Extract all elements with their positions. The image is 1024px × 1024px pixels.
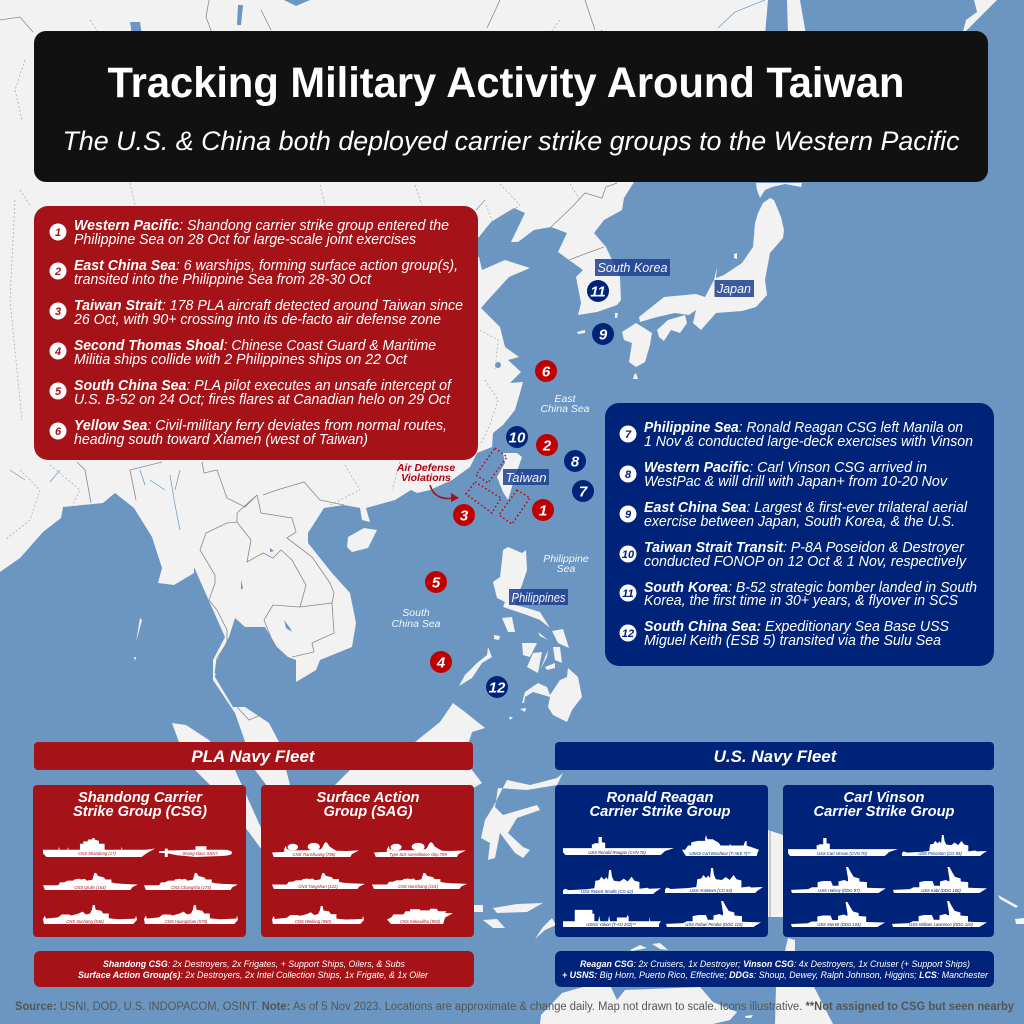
item 7: 1 Nov & conducted large-deck exercises with Vinson	[644, 434, 973, 450]
ship: CNS Huangshan: CNS Huangshan (570)	[165, 919, 208, 924]
panel: China activity list	[34, 206, 478, 460]
item 12: Miguel Keith (ESB 5) transited via the Sulu Sea	[644, 633, 941, 649]
item 9: 9	[625, 509, 632, 521]
panel: Shandong CSG: Shandong Carrier	[78, 789, 203, 806]
panel: Ronald Reagan CSG: Ronald Reagan	[606, 789, 714, 806]
source note: Source: USNI, DOD, U.S. INDOPACOM, OSINT. Note: As of 5 Nov 2023. Locations are approximate & change daily. Map not drawn to scale. Icons illustrative. **Not assigned to CSG but seen nearby	[15, 1001, 1015, 1013]
item 7: 7	[625, 429, 632, 441]
map markers: China: 5	[432, 574, 441, 592]
ship: CNS Tangshan	[272, 873, 365, 889]
ship: CNS Kekexilihu	[387, 909, 453, 924]
map: lakes	[130, 0, 501, 632]
ship: CNS Qiulin: CNS Qiulin (164)	[74, 885, 106, 890]
panel: Shandong CSG: Strike Group (CSG)	[73, 803, 207, 820]
item 7	[620, 420, 973, 450]
panel: Shandong CSG	[33, 785, 246, 937]
ship: USS Robert Smalls	[563, 870, 661, 894]
ship: CNS Changsha: CNS Changsha (173)	[171, 885, 212, 890]
map markers: U.S.: 10	[509, 430, 526, 446]
item 11: Korea, the first time in 30+ years, & flyover in SCS	[644, 593, 958, 609]
map: Australia	[540, 985, 833, 1024]
item 12: South China Sea: Expeditionary Sea Base USS	[644, 619, 949, 635]
map: Philippines	[459, 547, 582, 722]
map: Asian mainland	[0, 0, 768, 790]
ship: submarine: Shang-class SSN?	[182, 851, 218, 856]
ship: USS Antietam	[665, 868, 763, 893]
ship: USS Robert Smalls: USS Robert Smalls (CG 62)	[581, 889, 634, 894]
map markers: China: 2	[542, 438, 552, 454]
item 5: 5	[55, 386, 62, 398]
ship: USS Halsey	[791, 867, 886, 893]
item 2: transited into the Philippine Sea from 28-30 Oct	[74, 272, 372, 288]
item 3: 26 Oct, with 90+ crossing into its de-facto air defense zone	[73, 312, 441, 328]
panel: U.S. fleet composition note: + USNS: Big Horn, Puerto Rico, Effective; DDGs: Shoup, Dewey, Ralph Johnson, Higgins; LCS: Manchester	[562, 970, 989, 981]
title: Tracking Military Activity Around Taiwan	[108, 59, 904, 107]
sea labels: South	[402, 607, 430, 619]
sea labels: China Sea	[391, 618, 441, 630]
map markers: U.S.: 8	[571, 454, 580, 470]
item 6: Yellow Sea: Civil-military ferry deviates from normal routes,	[74, 418, 447, 434]
subtitle: The U.S. & China both deployed carrier strike groups to the Western Pacific	[62, 126, 960, 156]
panel: Ronald Reagan CSG: Carrier Strike Group	[590, 803, 730, 820]
panel: U.S. fleet composition note	[555, 951, 994, 987]
map: islands	[347, 183, 802, 552]
ship: CNS Changsha	[144, 873, 238, 890]
ship: USS Halsey: USS Halsey (DDG 97)	[818, 888, 860, 893]
panel: PLA fleet composition note	[34, 951, 474, 987]
map markers: China	[425, 360, 558, 673]
ship: USS Princeton	[902, 835, 987, 856]
item 4: 4	[54, 346, 61, 358]
panel: U.S. fleet composition note: Reagan CSG: 2x Cruisers, 1x Destroyer; Vinson CSG: 4x Destroyers, 1x Cruiser (+ Support Ships)	[580, 959, 970, 970]
item 4	[50, 338, 436, 368]
item 10: 10	[622, 549, 635, 561]
map: provincial borders	[5, 20, 580, 540]
ship: submarine	[159, 846, 232, 857]
item 10	[620, 540, 967, 570]
item 10: conducted FONOP on 12 Oct & 1 Nov, respectively	[644, 554, 967, 570]
ship: Type 815	[374, 842, 466, 857]
ship: USS Sterett: USS Sterett (DDG 104)	[817, 922, 861, 927]
ship: Type 815: Type 815 surveillance ship 799	[389, 852, 447, 857]
item 6: 6	[55, 426, 62, 438]
item 5: U.S. B-52 on 24 Oct; fires flares at Canadian helo on 29 Oct	[74, 392, 451, 408]
ship: USS William Lawrence	[892, 901, 987, 927]
item 2	[50, 258, 458, 288]
item 6	[50, 418, 447, 448]
item 8: WestPac & will drill with Japan+ from 10-20 Nov	[644, 474, 948, 490]
map markers: China: 4	[436, 654, 446, 672]
item 12	[620, 619, 949, 649]
item 9	[620, 500, 968, 530]
heading: PLA Navy Fleet	[34, 742, 473, 770]
map markers: China: 3	[460, 508, 469, 524]
map: Borneo, Sumatra and Indonesia	[134, 618, 1024, 1018]
ship: CNS Kekexilihu: CNS Kekexilihu (903)	[400, 919, 441, 924]
sea labels: East	[554, 393, 577, 405]
country labels: South Korea	[598, 261, 668, 275]
item 3: 3	[55, 306, 61, 318]
heading: PLA Navy Fleet: PLA Navy Fleet	[191, 747, 316, 766]
ship: USS William Lawrence: USS William Lawrence (DDG 110)	[909, 922, 973, 927]
panel: Carl Vinson CSG: Carrier Strike Group	[814, 803, 954, 820]
sea labels: Sea	[557, 563, 575, 575]
item 1: 1	[55, 227, 61, 239]
item 12: 12	[622, 628, 634, 640]
ship: USS Carl Vinson	[788, 838, 898, 856]
ship: CNS Nanchang	[372, 873, 467, 889]
item 1	[50, 218, 449, 248]
ship: USNS Yukon: USNS Yukon (T-AO 202)**	[586, 922, 636, 927]
panel: Ronald Reagan CSG	[555, 785, 768, 937]
map: rivers	[10, 0, 765, 530]
item 10: Taiwan Strait Transit: P-8A Poseidon & Destroyer	[644, 540, 965, 556]
ship: USS Kidd	[893, 867, 987, 893]
item 2: East China Sea: 6 warships, forming surface action group(s),	[74, 258, 458, 274]
ship: USS Carl Vinson: USS Carl Vinson (CVN 70)	[817, 851, 868, 856]
item 11	[620, 580, 977, 609]
heading: U.S. Navy Fleet	[555, 742, 994, 770]
ship: CNS Shandong	[43, 838, 155, 857]
country labels	[503, 259, 754, 605]
map: far-north coast	[787, 0, 997, 35]
panel: Surface Action Group	[261, 785, 474, 937]
map markers: China: 1	[539, 502, 547, 520]
ship: CNS Tianshuang: CNS Tianshuang (796)	[293, 852, 336, 857]
callout: Air Defense Violations: Air Defense	[396, 462, 455, 474]
callout: Air Defense Violations	[396, 462, 455, 498]
ship: CNS Xuchang	[43, 905, 137, 924]
country labels: Japan	[716, 282, 751, 296]
map: country borders	[0, 0, 770, 917]
ship: CNS Shandong: CNS Shandong (17)	[78, 851, 116, 856]
sea labels: Philippine	[543, 553, 589, 565]
map markers: U.S.	[486, 280, 614, 698]
item 5	[50, 378, 453, 408]
ship: USS Rafael Peralta	[666, 901, 761, 927]
item 1: Philippine Sea on 28 Oct for large-scale joint exercises	[74, 232, 416, 248]
map markers: U.S.: 11	[590, 284, 606, 300]
item 4: Militia ships collide with 2 Philippines ships on 22 Oct	[74, 352, 408, 368]
panel: PLA fleet composition note: Surface Action Group(s): 2x Destroyers, 2x Intel Collection Ships, 1x Frigate, & 1x Oiler	[78, 970, 429, 981]
item 3: Taiwan Strait: 178 PLA aircraft detected around Taiwan since	[74, 298, 463, 314]
ship: USNS Yukon	[563, 910, 661, 927]
item 8: Western Pacific: Carl Vinson CSG arrived in	[644, 460, 927, 476]
sea labels: China Sea	[540, 403, 590, 415]
ship: CNS Nanchang: CNS Nanchang (101)	[398, 884, 439, 889]
sea labels	[391, 393, 590, 630]
map markers: U.S.: 12	[489, 680, 506, 696]
country labels: Taiwan	[506, 471, 547, 485]
item 1: Western Pacific: Shandong carrier strike group entered the	[74, 218, 449, 234]
ship: USS Antietam: USS Antietam (CG 54)	[690, 888, 733, 893]
ship: USS Sterett	[791, 902, 885, 927]
ship: USNS Carl Brashear: USNS Carl Brashear (T-AKE 7)**	[689, 851, 751, 856]
map markers: U.S.: 7	[579, 484, 588, 500]
air defense violation zones	[466, 448, 530, 524]
ship: USS Ronald Reagan: USS Ronald Reagan (CVN 76)	[588, 850, 646, 855]
panel: Surface Action Group: Surface Action	[316, 789, 420, 806]
item 9: exercise between Japan, South Korea, & the U.S.	[644, 514, 955, 530]
ship: CNS Tianshuang	[272, 842, 359, 857]
arrow	[430, 485, 453, 498]
item 11: South Korea: B-52 strategic bomber landed in South	[644, 580, 977, 596]
country labels: Philippines	[512, 591, 566, 605]
map markers: China: 6	[542, 364, 551, 380]
item 7: Philippine Sea: Ronald Reagan CSG left Manila on	[644, 420, 963, 436]
item 6: heading south toward Xiamen (west of Taiwan)	[74, 432, 368, 448]
item 8: 8	[625, 469, 632, 481]
ship: USS Rafael Peralta: USS Rafael Peralta (DDG 115)	[685, 922, 743, 927]
map markers: U.S.: 9	[599, 326, 608, 344]
item 2: 2	[54, 266, 61, 278]
panel: U.S. activity list	[605, 403, 994, 666]
item 3	[50, 298, 463, 328]
ship: CNS Weifang	[272, 906, 364, 924]
panel: PLA fleet composition note: Shandong CSG: 2x Destroyers, 2x Frigates, + Support Ships, Oilers, & Subs	[103, 959, 405, 970]
title panel	[34, 31, 988, 182]
panel: Carl Vinson CSG: Carl Vinson	[844, 789, 924, 806]
item 8	[620, 460, 948, 490]
ship: USS Kidd: USS Kidd (DDG 100)	[921, 888, 961, 893]
callout: Air Defense Violations: Violations	[401, 472, 451, 484]
ship: CNS Qiulin	[43, 873, 138, 890]
item 9: East China Sea: Largest & first-ever trilateral aerial	[644, 500, 968, 516]
item 5: South China Sea: PLA pilot executes an unsafe intercept of	[74, 378, 453, 394]
item 4: Second Thomas Shoal: Chinese Coast Guard & Maritime	[74, 338, 436, 354]
arrow head	[451, 493, 459, 502]
heading: U.S. Navy Fleet: U.S. Navy Fleet	[714, 747, 838, 766]
ship: CNS Xuchang: CNS Xuchang (536)	[66, 919, 104, 924]
ship: USS Ronald Reagan	[563, 837, 674, 855]
ship: CNS Huangshan	[144, 905, 238, 924]
item 11: 11	[622, 588, 634, 600]
panel: Surface Action Group: Group (SAG)	[324, 803, 413, 820]
panel: Carl Vinson CSG	[783, 785, 994, 937]
ship: USS Princeton: USS Princeton (CG 59)	[918, 851, 962, 856]
ship: CNS Tangshan: CNS Tangshan (122)	[298, 884, 338, 889]
ship: CNS Weifang: CNS Weifang (550)	[295, 919, 332, 924]
ship: USNS Carl Brashear	[682, 835, 759, 856]
